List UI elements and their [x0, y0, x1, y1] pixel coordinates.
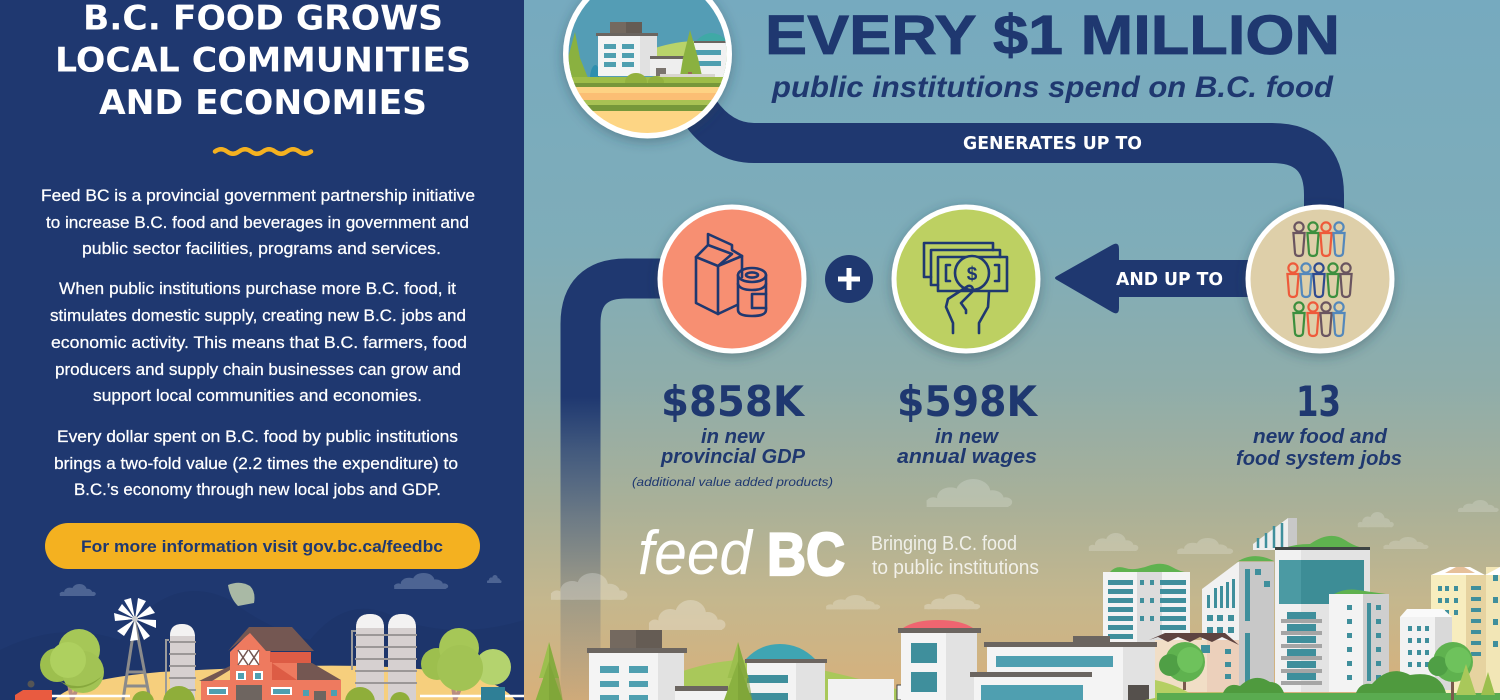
windmill [114, 598, 156, 700]
text: third paragraph: brings a two-fold value (2.2 times the expenditure) to [54, 455, 458, 473]
subtitle: public institutions spend on B.C. food [771, 71, 1334, 104]
silos right [352, 614, 417, 700]
white tower with green roof [1103, 564, 1190, 644]
stat: wages: in new [935, 426, 999, 448]
office building [587, 630, 728, 700]
farm illustration [0, 573, 524, 700]
arrow: and up to [1055, 244, 1260, 313]
wide low building [970, 636, 1157, 700]
truck [828, 679, 919, 700]
dark hills [0, 591, 524, 700]
sky clouds [649, 479, 1499, 630]
text: intro paragraph [41, 187, 475, 258]
stat: GDP: in new [701, 426, 765, 448]
left buildings [535, 620, 1157, 700]
panel heading: LOCAL COMMUNITIES [55, 40, 471, 80]
field [55, 666, 515, 700]
stat: GDP: $858K [661, 377, 805, 426]
icon: hand holding cash [924, 243, 1007, 333]
dollar sign: $ [967, 264, 978, 285]
cloud over pipe [551, 573, 627, 600]
feed BC logo: Bringing B.C. food [871, 533, 1017, 555]
white tower small [1400, 609, 1452, 690]
panel heading [58, 4, 468, 114]
rear slanted tower [1253, 518, 1297, 550]
text: third paragraph [54, 428, 458, 499]
icon: milk carton and can [696, 234, 766, 316]
stat: jobs [1236, 377, 1402, 470]
plus sign [825, 255, 873, 303]
feed BC logo [638, 519, 1039, 588]
pine middle [723, 642, 753, 700]
text: second paragraph: support local communities and economies. [93, 387, 422, 405]
title: EVERY $1 MILLION [765, 3, 1340, 66]
pine left [535, 642, 563, 700]
text: second paragraph [50, 280, 467, 405]
text: intro paragraph: public sector facilities, programs and services. [82, 240, 441, 258]
squiggle divider [215, 149, 311, 154]
domed building [745, 644, 827, 700]
stat: GDP [632, 377, 833, 489]
fading pipe down to the city [580, 278, 670, 700]
feed BC logo: feed [638, 519, 754, 588]
stat: GDP: (additional value added products) [632, 477, 833, 489]
text: intro paragraph: to increase B.C. food and beverages in government and [46, 214, 469, 232]
stat: wages [897, 377, 1038, 468]
text: third paragraph: B.C.’s economy through new local jobs and GDP. [74, 481, 441, 499]
building cluster right [1103, 518, 1500, 693]
feed BC logo: to public institutions [872, 557, 1039, 579]
cream tower [1431, 567, 1500, 693]
ground and trees [1145, 642, 1500, 700]
feed BC logo: BC [767, 521, 845, 588]
left panel [0, 0, 524, 700]
connector ribbon: generates up to [700, 112, 1324, 225]
silo left [166, 624, 196, 700]
main glass tower [1275, 536, 1370, 692]
stat: jobs: new food and [1253, 426, 1388, 448]
circle: jobs [1246, 204, 1394, 354]
fence, tractors and bushes [15, 680, 524, 700]
stat: jobs: 13 [1296, 377, 1341, 426]
text: intro paragraph: Feed BC is a provincial government partnership initiative [41, 187, 475, 205]
stat: wages: annual wages [897, 446, 1037, 468]
back hills [680, 660, 900, 700]
text: second paragraph: producers and supply chain businesses can grow and [55, 361, 461, 379]
circle: food products [658, 204, 806, 354]
text: second paragraph: When public institutions purchase more B.C. food, it [59, 280, 456, 298]
button: more information: For more information visit gov.bc.ca/feedbc [81, 537, 443, 556]
panel heading: AND ECONOMIES [99, 83, 427, 123]
farm trees [40, 628, 511, 700]
text: third paragraph: Every dollar spent on B.C. food by public institutions [57, 428, 458, 446]
right sky background [524, 0, 1500, 700]
stat: GDP: provincial GDP [660, 446, 806, 468]
stat: wages: $598K [897, 377, 1038, 426]
icon: thirteen people [1287, 222, 1352, 336]
slanted tower [1202, 556, 1274, 687]
text: second paragraph: stimulates domestic supply, creating new B.C. jobs and [50, 307, 466, 325]
barn [199, 627, 341, 700]
circle: wages [892, 204, 1040, 354]
moon [228, 583, 254, 606]
button: more information [45, 523, 480, 569]
stat: jobs: food system jobs [1236, 448, 1402, 470]
label: and up to: AND UP TO [1116, 269, 1223, 290]
cityscape [535, 518, 1500, 700]
front right tower [1329, 590, 1389, 692]
farm clouds [60, 573, 502, 596]
red dome building [898, 620, 981, 700]
label: generates up to: GENERATES UP TO [963, 133, 1142, 154]
circle: public institution illustration [560, 0, 735, 141]
text: second paragraph: economic activity. This means that B.C. farmers, food [51, 334, 467, 352]
townhouse [1149, 633, 1239, 692]
